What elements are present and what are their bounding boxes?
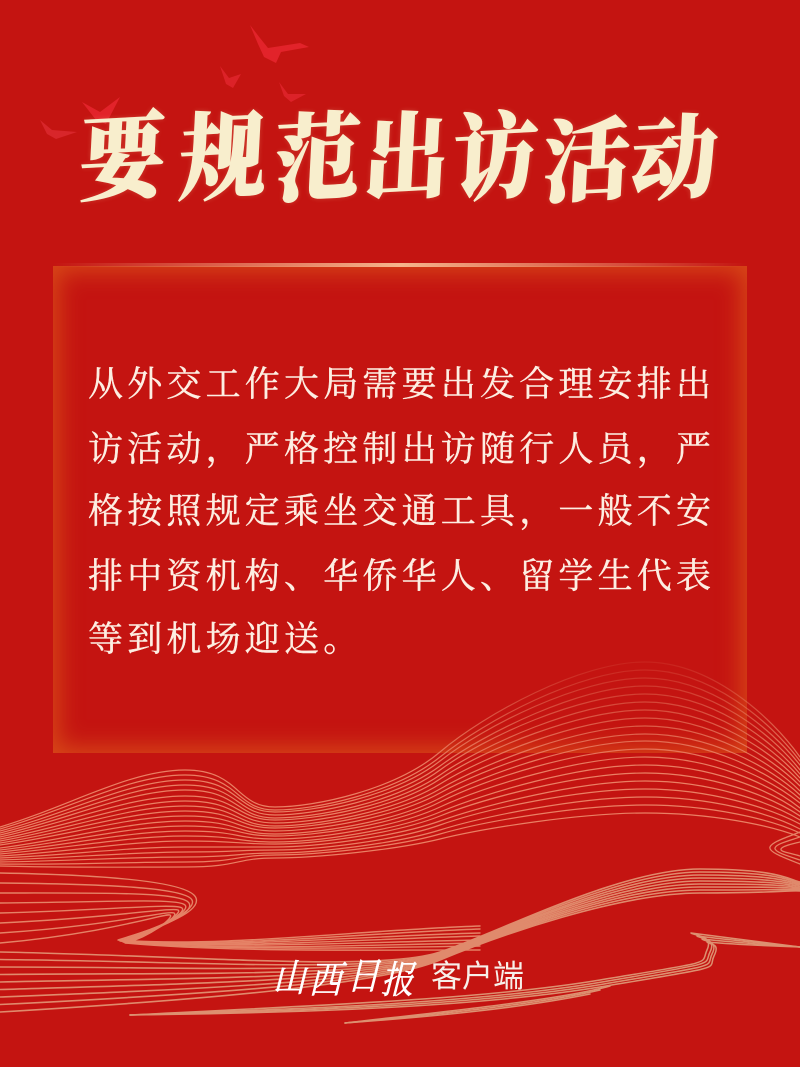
wave band: upper mountain	[0, 662, 800, 867]
wave band: right edge fold	[770, 832, 800, 864]
body text: 访活动，严格控制出访随行人员，严	[88, 430, 715, 469]
wave band: left fold	[0, 873, 480, 950]
logo: 报	[378, 949, 424, 1004]
title: 访	[449, 79, 543, 221]
body text: 从外交工作大局需要出发合理安排出	[88, 365, 715, 404]
title	[76, 79, 721, 222]
logo	[270, 945, 524, 1004]
body text: 格按照规定乘坐交通工具，一般不安	[88, 492, 715, 531]
title: 规	[176, 79, 270, 221]
body text	[88, 365, 715, 659]
logo: 山	[270, 947, 316, 1002]
body text: 排中资机构、华侨华人、留学生代表	[88, 557, 715, 596]
title: 要	[76, 79, 170, 221]
wave band: bottom wedge	[130, 933, 800, 1023]
logo: 客户端	[431, 959, 524, 994]
logo: 西	[306, 949, 352, 1004]
wave band: lower rising ribbon	[0, 869, 800, 1012]
title: 出	[360, 79, 454, 221]
title: 活	[541, 86, 633, 222]
top glow line of panel	[53, 263, 747, 267]
title: 动	[629, 84, 721, 220]
title: 范	[271, 80, 365, 222]
birds	[40, 25, 309, 139]
logo: 日	[344, 945, 390, 1000]
body text: 等到机场迎送。	[88, 620, 362, 659]
panel: text box	[53, 266, 747, 753]
